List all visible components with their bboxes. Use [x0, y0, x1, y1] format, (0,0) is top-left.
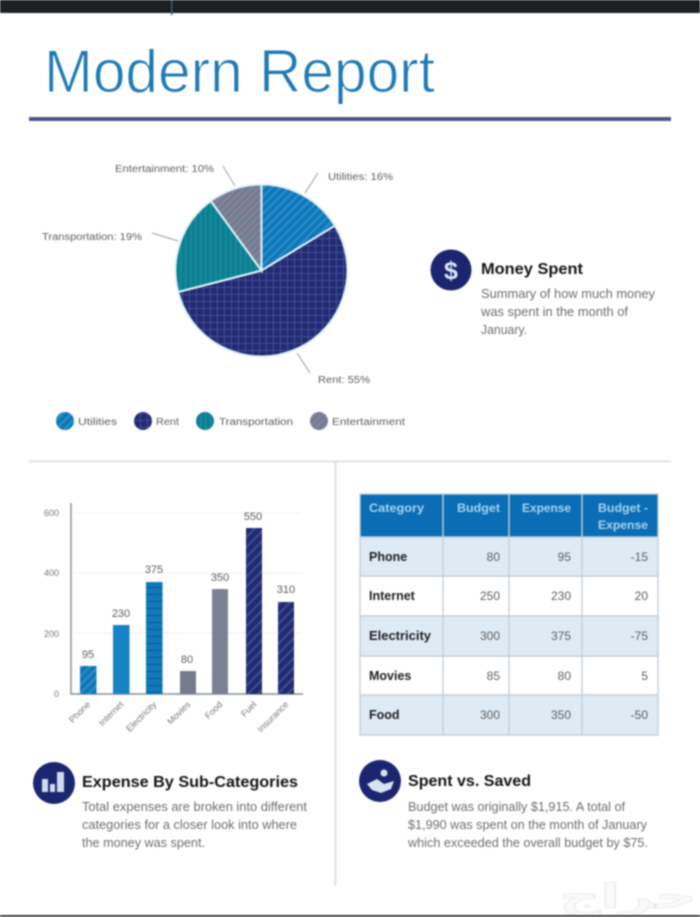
row: movies: 85 [487, 669, 500, 683]
text: money spent summary: Summary of how much money [481, 287, 656, 301]
row: electricity: 300 [480, 629, 500, 643]
text: spent vs. saved description: Budget was originally $1,915. A total of [408, 800, 626, 814]
x axis labels: Phone [67, 699, 92, 725]
table header: Category [369, 501, 424, 515]
table grid [360, 494, 658, 735]
table header: Expense [598, 518, 648, 532]
row: phone: 95 [558, 550, 571, 564]
bar values [82, 511, 295, 666]
row: internet: 230 [551, 589, 571, 603]
table header: Expense [522, 501, 571, 515]
pie legend: Utilities [78, 417, 117, 428]
text: money spent summary [480, 287, 656, 337]
row: electricity: -75 [631, 629, 648, 643]
y axis labels: 400 [44, 568, 59, 578]
y axis labels: 0 [54, 689, 59, 699]
pie legend [56, 412, 405, 430]
bar values: 310 [277, 584, 295, 596]
row: movies: 80 [558, 669, 571, 683]
icon: bar chart [33, 762, 75, 804]
text: spent vs. saved description [407, 800, 648, 850]
row: phone [369, 550, 648, 564]
x axis labels [67, 699, 290, 734]
slice: entertainment [211, 184, 262, 270]
pie label: entertainment: Entertainment: 10% [115, 164, 214, 175]
row: internet: 20 [635, 589, 648, 603]
pie chart [152, 166, 347, 373]
bar values: 80 [181, 654, 193, 666]
y axis labels: 200 [44, 629, 59, 639]
icon: dollar [430, 250, 472, 290]
table backgrounds [360, 494, 658, 735]
title: Modern Report [44, 38, 435, 105]
x axis labels: Fuel [239, 699, 258, 719]
text: expense description [82, 800, 308, 850]
bar values: 350 [211, 572, 229, 584]
pie label: transportation: Transportation: 19% [42, 232, 142, 243]
bar values: 375 [145, 564, 163, 576]
text: expense description: the money was spent. [82, 836, 205, 850]
icon: dollar: $ [444, 257, 458, 285]
slice: utilities [262, 184, 335, 270]
text: spent vs. saved description: $1,990 was spent on the month of January [408, 818, 648, 832]
heading: money spent: Money Spent [481, 261, 584, 278]
bar values: 550 [244, 511, 262, 523]
row: food [369, 708, 648, 722]
text: money spent summary: was spent in the month of [480, 305, 629, 319]
watermark: حراج [560, 877, 696, 917]
leader lines [152, 166, 318, 373]
icon: hand with coin [359, 760, 401, 802]
slice: transportation [175, 201, 262, 292]
x axis labels: Insurance [255, 699, 290, 734]
bar values: 95 [82, 649, 94, 661]
x axis labels: Food [203, 699, 224, 721]
table header: Budget - [598, 501, 648, 515]
pie label: utilities: Utilities: 16% [328, 172, 393, 183]
text: expense description: Total expenses are broken into different [82, 800, 308, 814]
x axis labels: Movies [165, 699, 193, 727]
bar values: 230 [112, 608, 130, 620]
row: internet: 250 [480, 589, 500, 603]
budget table [360, 494, 658, 735]
row: internet: Internet [369, 589, 416, 603]
x axis labels: Electricity [124, 699, 159, 734]
row: food: -50 [631, 708, 648, 722]
text: money spent summary: January. [481, 323, 527, 337]
heading: spent vs. saved: Spent vs. Saved [408, 773, 531, 790]
text: expense description: categories for a closer look into where [82, 818, 297, 832]
row: food: 350 [551, 708, 571, 722]
row: food: Food [369, 708, 400, 722]
bar chart [44, 503, 303, 734]
pie label: rent: Rent: 55% [318, 375, 370, 386]
title rule [29, 117, 671, 121]
row: phone: Phone [369, 550, 407, 564]
table header [369, 501, 648, 532]
row: internet [369, 589, 648, 603]
row: movies [369, 669, 648, 683]
bottom dark line [0, 915, 700, 917]
table header: Budget [457, 501, 500, 515]
row: movies: Movies [369, 669, 411, 683]
row: food: 300 [480, 708, 500, 722]
top dark bar [0, 0, 700, 15]
x axis labels: Internet [97, 699, 126, 728]
row: movies: 5 [641, 669, 648, 683]
heading: expense by sub-categories: Expense By Sub-Categories [82, 774, 298, 791]
pie legend: Transportation [219, 417, 293, 428]
row: electricity [369, 629, 648, 643]
axes [71, 503, 303, 694]
section dividers [29, 460, 671, 886]
pie legend: Entertainment [332, 417, 405, 428]
row: electricity: Electricity [369, 629, 431, 643]
row: phone: 80 [487, 550, 500, 564]
y axis labels: 600 [44, 508, 59, 518]
grid lines [75, 513, 302, 633]
row: phone: -15 [631, 550, 648, 564]
slice: rent [178, 226, 347, 356]
y axis labels [44, 508, 59, 699]
pie legend: Rent [156, 417, 179, 428]
row: electricity: 375 [551, 629, 571, 643]
text: spent vs. saved description: which exceeded the overall budget by $75. [407, 836, 648, 850]
bars [80, 528, 294, 694]
